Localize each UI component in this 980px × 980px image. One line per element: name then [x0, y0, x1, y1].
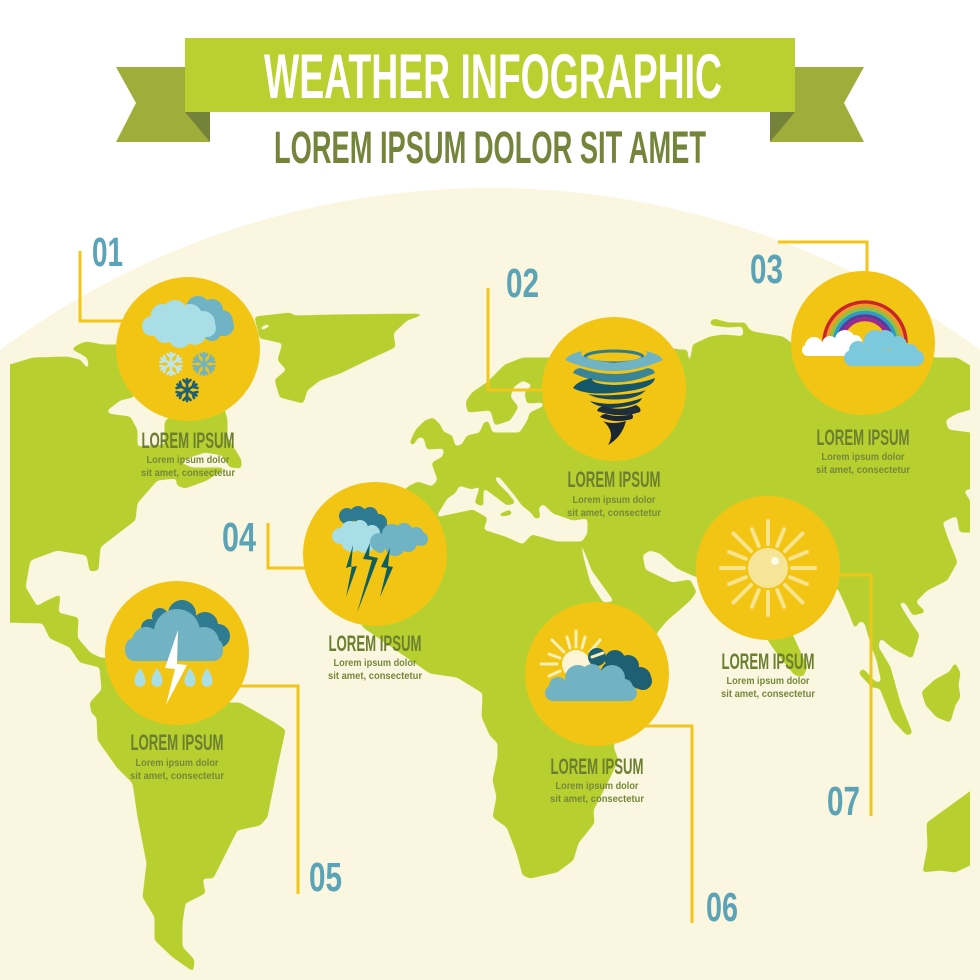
label 05 — [130, 730, 224, 782]
label 02 — [567, 467, 661, 519]
connector lines — [80, 242, 871, 923]
map: Eurasia and Africa with inner seas — [340, 330, 980, 878]
item 07: sun — [696, 496, 840, 640]
label 06: sit amet, consectetur — [550, 793, 644, 805]
icon: rainbow — [802, 302, 924, 366]
label 02: Lorem ipsum dolor — [572, 494, 656, 506]
subtitle: LOREM IPSUM DOLOR SIT AMET — [274, 122, 706, 173]
label 01: sit amet, consectetur — [141, 467, 235, 479]
title ribbon — [116, 38, 864, 142]
world map — [0, 313, 980, 971]
icon: storm clouds and lightning — [332, 506, 428, 613]
label 03 — [816, 425, 910, 476]
label 01 — [141, 428, 235, 479]
item 01: snow — [116, 277, 260, 421]
circle 01 — [116, 277, 260, 421]
item 03: rainbow — [791, 271, 935, 415]
ribbon body — [185, 38, 795, 112]
circle 06 — [525, 602, 669, 746]
ribbon right tail — [770, 67, 864, 142]
ribbon left tail — [116, 67, 210, 142]
icon: snow cloud — [142, 296, 234, 401]
label 02: sit amet, consectetur — [567, 507, 661, 519]
label 07: Lorem ipsum dolor — [726, 675, 810, 687]
connector 02 — [488, 288, 550, 390]
circle 04 — [303, 482, 447, 626]
label 04: LOREM IPSUM — [328, 631, 422, 656]
label 06: LOREM IPSUM — [550, 754, 644, 779]
map: Greenland — [255, 313, 424, 403]
label 07: sit amet, consectetur — [721, 688, 815, 700]
map: India — [768, 630, 807, 676]
icon: sun — [721, 521, 815, 615]
label 05: sit amet, consectetur — [130, 770, 224, 782]
circle 02 — [542, 317, 686, 461]
circle 03 — [791, 271, 935, 415]
connector 05 — [236, 686, 298, 894]
label 06: Lorem ipsum dolor — [556, 780, 638, 792]
number 05: 05 — [309, 854, 342, 900]
label 03: LOREM IPSUM — [816, 425, 910, 450]
number 04: 04 — [222, 514, 256, 560]
map: Sicily — [500, 510, 512, 516]
connector 04 — [268, 523, 312, 568]
label 04: Lorem ipsum dolor — [334, 657, 416, 669]
item 02: tornado — [542, 317, 686, 461]
ribbon right fold — [770, 112, 795, 142]
connector 07 — [835, 575, 871, 816]
label 03: sit amet, consectetur — [816, 464, 910, 476]
number 01: 01 — [92, 229, 123, 275]
label 01: LOREM IPSUM — [142, 428, 234, 453]
connector 06 — [644, 726, 692, 923]
map: the Americas — [0, 342, 285, 971]
label 04: sit amet, consectetur — [328, 670, 422, 682]
connector 03 — [778, 242, 867, 276]
icon: tornado — [565, 351, 663, 445]
label 03: Lorem ipsum dolor — [822, 451, 904, 463]
circle 07 — [696, 496, 840, 640]
label 04 — [328, 631, 422, 682]
connector 01 — [80, 251, 125, 321]
label 05: LOREM IPSUM — [130, 730, 224, 755]
item 04: storm — [303, 482, 447, 626]
map: Arctic island — [710, 319, 749, 337]
item 05: thunderstorm rain — [105, 581, 249, 725]
label 06 — [550, 754, 644, 805]
label 05: Lorem ipsum dolor — [136, 757, 218, 769]
map: Australia fragment — [923, 791, 970, 872]
label 07 — [721, 649, 815, 700]
icon: sun behind clouds — [541, 631, 652, 701]
icon: rain cloud with lightning — [125, 600, 230, 705]
number 03: 03 — [750, 246, 783, 292]
label 07: LOREM IPSUM — [722, 649, 814, 674]
ribbon left fold — [185, 112, 210, 142]
item 06: partly cloudy — [525, 602, 669, 746]
circle 05 — [105, 581, 249, 725]
number 02: 02 — [506, 260, 539, 306]
number 07: 07 — [827, 778, 860, 824]
number 06: 06 — [706, 884, 738, 930]
label 01: Lorem ipsum dolor — [146, 454, 230, 466]
label 02: LOREM IPSUM — [568, 467, 660, 492]
map: Borneo — [922, 663, 960, 722]
